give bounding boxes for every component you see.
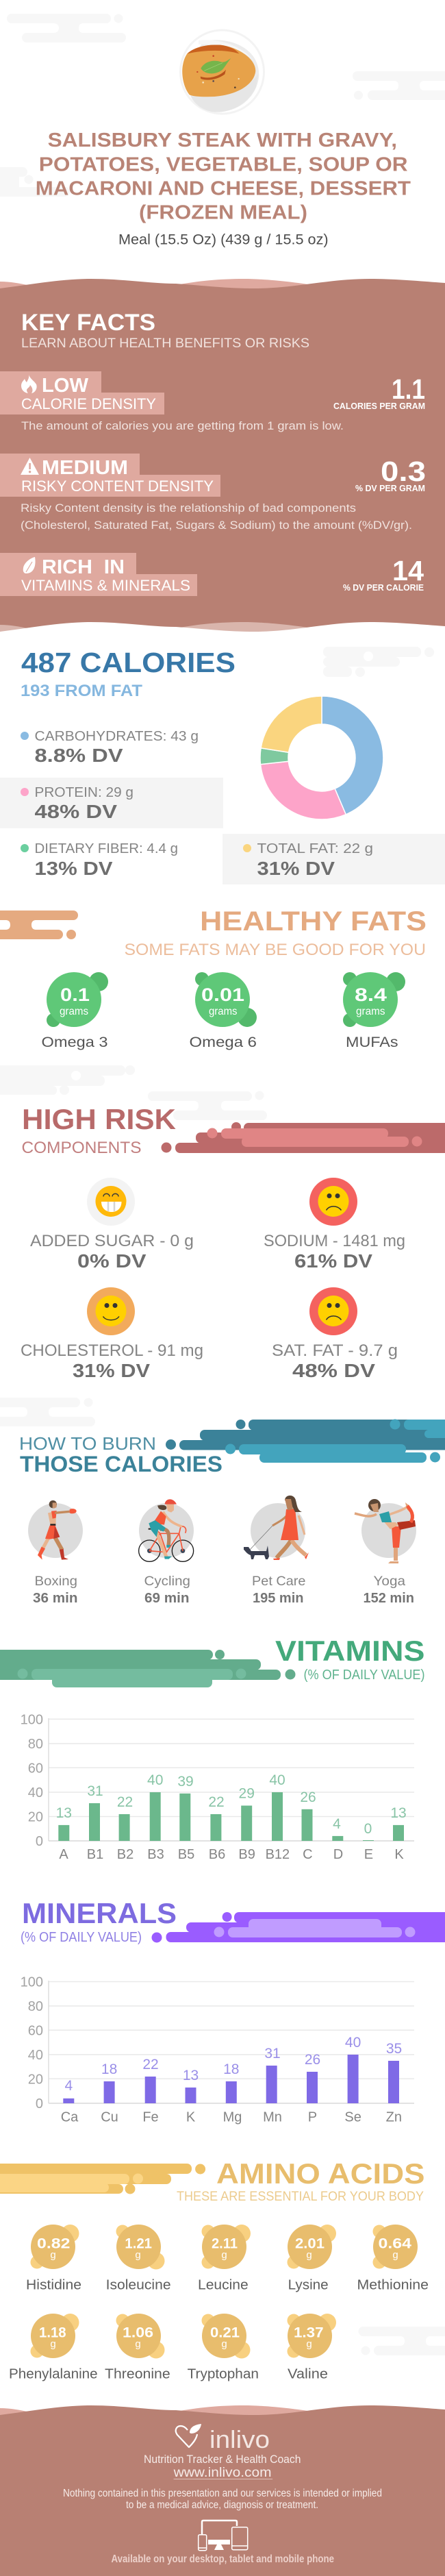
item: carbohydrates: CARBOHYDRATES: 43 g: [34, 729, 199, 744]
badge: omega 3: grams: [60, 1006, 88, 1017]
fact: vitamins and minerals: VITAMINS & MINERALS: [21, 577, 190, 594]
activity: yoga: [355, 1499, 416, 1563]
subheading: daily value: (% OF DAILY VALUE): [21, 1930, 142, 1945]
heading: high risk: HIGH RISK: [22, 1103, 176, 1135]
bar chart: vitamins: B2: [117, 1847, 134, 1862]
fact: vitamins and minerals: 14: [392, 555, 424, 586]
fact: risky content density: 0.3: [381, 456, 426, 487]
label: minutes: 195 min: [253, 1591, 304, 1606]
item: cholesterol: CHOLESTEROL - 91 mg: [21, 1341, 203, 1360]
panel: key facts: [0, 279, 445, 637]
subheading: amino acids: THESE ARE ESSENTIAL FOR YOUR BODY: [177, 2190, 424, 2204]
header: food image and title: [36, 30, 411, 248]
bar chart: minerals: 13: [183, 2068, 199, 2083]
bar chart: vitamins: B3: [147, 1847, 164, 1862]
bar chart: vitamins: B1: [87, 1847, 103, 1862]
bar chart: minerals: 22: [142, 2057, 159, 2072]
bar chart: minerals: Mg: [223, 2110, 242, 2125]
bar chart: vitamins: C: [303, 1847, 313, 1862]
bar chart: minerals: 0: [36, 2096, 43, 2111]
bubbles: decorative lobes: [30, 2225, 386, 2358]
fact: calorie density: [0, 371, 425, 432]
amino acid units: g: [221, 2249, 227, 2261]
amino acid names: [9, 2278, 429, 2382]
label: boxing: Yoga: [374, 1574, 405, 1589]
activity: pet care: [244, 1496, 309, 1560]
amino acid names: Isoleucine: [106, 2278, 171, 2293]
disclaimer: [63, 2488, 382, 2511]
label: minutes: 36 min: [33, 1591, 78, 1606]
label: minutes: [33, 1591, 414, 1606]
bar chart: vitamins: 13: [56, 1805, 72, 1821]
subheading: daily value: (% OF DAILY VALUE): [304, 1668, 424, 1683]
serving size: Meal (15.5 Oz) (439 g / 15.5 oz): [118, 232, 329, 248]
title: MACARONI AND CHEESE, DESSERT: [36, 178, 411, 200]
title: (FROZEN MEAL): [139, 201, 307, 223]
bar chart: vitamins: 80: [28, 1737, 43, 1752]
label: boxing: [34, 1574, 405, 1589]
item: total fat: 31% DV: [257, 858, 335, 879]
banner: orange bars: [0, 911, 78, 939]
amino acid units: g: [306, 2338, 312, 2350]
amino acid names: Valine: [288, 2367, 328, 2382]
icon: devices: [199, 2521, 248, 2551]
bar chart: minerals: 18: [101, 2061, 117, 2077]
bar chart: minerals: 31: [264, 2046, 281, 2061]
bar chart: vitamins: 40: [147, 1772, 163, 1788]
tagline: Nutrition Tracker & Health Coach: [144, 2453, 301, 2466]
disclaimer: to be a medical advice, diagnosis or treatment.: [126, 2499, 318, 2511]
bar chart: vitamins: D: [333, 1847, 343, 1862]
bar chart: vitamins: 0: [36, 1834, 43, 1849]
fact: calorie density: CALORIE DENSITY: [21, 395, 156, 412]
amino acid units: g: [50, 2338, 56, 2350]
amino acid units: g: [306, 2249, 312, 2261]
heading: those calories: THOSE CALORIES: [20, 1452, 222, 1476]
fact: risky content density: (Cholesterol, Saturated Fat, Sugars & Sodium) to the amount (%DV/gr).: [21, 519, 412, 532]
amino acid discs: [31, 2225, 418, 2358]
heading: key facts: KEY FACTS: [21, 310, 155, 336]
item: added sugar: [30, 1178, 194, 1272]
bar chart: minerals: Fe: [142, 2110, 159, 2125]
item: added sugar: ADDED SUGAR - 0 g: [30, 1232, 194, 1250]
icon: warning triangle: [21, 458, 39, 475]
bar chart: minerals: 60: [28, 2024, 43, 2039]
bar chart: vitamins: B5: [178, 1847, 194, 1862]
amino acid names: Tryptophan: [188, 2367, 259, 2382]
amino acid names: Lysine: [288, 2278, 329, 2293]
item: sodium: [264, 1178, 405, 1272]
bar chart: minerals: 35: [386, 2041, 402, 2057]
bar chart: minerals: 18: [223, 2061, 239, 2077]
bar chart: vitamins: 13: [390, 1805, 407, 1821]
amino acid values: 1.37: [294, 2325, 323, 2341]
item: dietary fiber: 13% DV: [34, 858, 113, 879]
heading: amino acids: AMINO ACIDS: [216, 2157, 424, 2190]
badge: omega 3: [41, 972, 108, 1050]
banner: green bars: [0, 1650, 296, 1687]
bar chart: minerals: 80: [28, 1999, 43, 2014]
bar chart: vitamins: 0: [364, 1821, 372, 1837]
bar chart: minerals: Cu: [101, 2110, 118, 2125]
fact: risky content density: % DV PER GRAM: [355, 483, 425, 493]
fact: risky content density: RISKY CONTENT DENSITY: [21, 478, 214, 495]
badge: mufas: grams: [356, 1006, 385, 1017]
item: saturated fat: 48% DV: [292, 1360, 375, 1381]
bar chart: minerals: 40: [28, 2048, 43, 2063]
bar chart: minerals: [21, 1974, 414, 2125]
banner: purple bars: [152, 1912, 445, 1943]
badge: omega 3: 0.1: [60, 984, 90, 1005]
panel: high risk components: [21, 1103, 445, 1381]
banner: teal bars: [166, 1420, 445, 1463]
fact: vitamins and minerals: % DV PER CALORIE: [343, 582, 424, 593]
bar chart: vitamins: B9: [238, 1847, 255, 1862]
item: protein: [21, 785, 134, 822]
bar chart: vitamins: B6: [209, 1847, 225, 1862]
fact: risky content density: Risky Content density is the relationship of bad components: [21, 502, 356, 515]
item: dietary fiber: DIETARY FIBER: 4.4 g: [34, 841, 178, 856]
bar chart: vitamins: 40: [28, 1785, 43, 1800]
panel: healthy fats: [0, 906, 427, 1050]
fact: calorie density: 1.1: [392, 373, 425, 405]
amino acid units: [50, 2249, 398, 2350]
badge: omega 6: 0.01: [201, 984, 244, 1005]
panel: vitamins: [0, 1635, 424, 1862]
label: boxing: Boxing: [34, 1574, 77, 1589]
item: total fat: [243, 841, 373, 879]
bar chart: minerals: Se: [344, 2110, 361, 2125]
item: total fat: TOTAL FAT: 22 g: [257, 841, 373, 856]
bar chart: vitamins: 100: [21, 1713, 43, 1728]
amino acid units: g: [221, 2338, 227, 2350]
bar chart: minerals: 100: [21, 1974, 43, 1990]
bar chart: vitamins: 26: [300, 1789, 316, 1805]
panel: minerals: [21, 1897, 445, 2125]
disclaimer: Nothing contained in this presentation and our services is intended or implied: [63, 2488, 382, 2499]
bar chart: vitamins: 4: [333, 1816, 341, 1832]
fact: vitamins and minerals: [0, 553, 424, 596]
website link: www.inlivo.com: [173, 2466, 272, 2480]
amino acid units: g: [50, 2249, 56, 2261]
amino acid names: Leucine: [198, 2278, 249, 2293]
title: POTATOES, VEGETABLE, SOUP OR: [39, 153, 408, 175]
amino acid values: 2.11: [212, 2236, 238, 2252]
fact: calorie density: The amount of calories you are getting from 1 gram is low.: [21, 420, 344, 432]
label: minutes: 69 min: [144, 1591, 189, 1606]
item: cholesterol: [21, 1287, 203, 1381]
bar chart: vitamins: 22: [208, 1794, 225, 1810]
bar chart: vitamins: E: [364, 1847, 373, 1862]
banner: red bars: [162, 1122, 445, 1153]
bar chart: minerals: Ca: [61, 2110, 79, 2125]
fact: risky content density: MEDIUM: [42, 457, 128, 479]
amino acid values: 1.21: [125, 2236, 152, 2252]
heading: how to burn: HOW TO BURN: [19, 1433, 156, 1454]
bar chart: vitamins: B12: [266, 1847, 290, 1862]
banner: yellow bars: [0, 2164, 205, 2194]
amino acid units: g: [135, 2249, 141, 2261]
amino acid values: 2.01: [295, 2236, 325, 2252]
badge: omega 6: grams: [209, 1006, 237, 1017]
amino acid values: 0.64: [378, 2236, 411, 2252]
title: SALISBURY STEAK WITH GRAVY,: [48, 129, 397, 151]
item: dietary fiber: [21, 841, 178, 879]
badge: omega 6: Omega 6: [189, 1035, 257, 1050]
bar chart: minerals: 26: [305, 2052, 320, 2068]
amino acid names: Histidine: [26, 2278, 81, 2293]
bar chart: minerals: K: [186, 2110, 196, 2125]
bar chart: minerals: Zn: [386, 2110, 402, 2125]
amino acid names: Threonine: [105, 2367, 170, 2382]
item: carbohydrates: [21, 729, 199, 766]
badge: mufas: [343, 972, 405, 1050]
bar chart: vitamins: 60: [28, 1761, 43, 1776]
amino acid values: [37, 2236, 411, 2341]
bar chart: vitamins: 29: [239, 1785, 255, 1802]
fact: vitamins and minerals: RICH IN: [42, 556, 125, 578]
badge: mufas: MUFAs: [346, 1035, 398, 1050]
fact: calorie density: CALORIES PER GRAM: [333, 401, 425, 411]
heading: minerals: MINERALS: [22, 1897, 177, 1929]
label: minutes: 152 min: [363, 1591, 414, 1606]
fact: risky content density: [0, 454, 426, 532]
heading: 487 calories: 487 CALORIES: [21, 647, 236, 678]
activity: cycling: [139, 1499, 194, 1561]
bar chart: vitamins: [21, 1713, 414, 1862]
panel: footer: [0, 2405, 445, 2576]
badge: omega 6: [189, 972, 257, 1050]
bar chart: vitamins: K: [394, 1847, 404, 1862]
item: carbohydrates: 8.8% DV: [34, 745, 123, 766]
item: protein: 48% DV: [34, 801, 117, 822]
amino acid units: g: [135, 2338, 141, 2350]
bar chart: vitamins: 20: [28, 1810, 43, 1825]
panel: how to burn calories: [19, 1420, 445, 1606]
availability note: Available on your desktop, tablet and mobile phone: [111, 2553, 334, 2565]
title: [36, 129, 411, 223]
subheading: key facts: LEARN ABOUT HEALTH BENEFITS OR RISKS: [21, 336, 309, 351]
panel: calories: [0, 647, 445, 884]
heading: healthy fats: HEALTHY FATS: [200, 906, 427, 937]
amino acid values: 1.18: [39, 2325, 66, 2341]
subheading: components: COMPONENTS: [22, 1139, 141, 1157]
amino acid values: 0.82: [37, 2236, 70, 2252]
item: added sugar: 0% DV: [77, 1250, 147, 1272]
bar chart: minerals: Mn: [263, 2110, 282, 2125]
fact: calorie density: LOW: [42, 375, 89, 397]
icon: flame: [21, 375, 37, 393]
bar chart: minerals: P: [308, 2110, 317, 2125]
heading: vitamins: VITAMINS: [275, 1635, 424, 1667]
bar chart: vitamins: 22: [117, 1794, 133, 1810]
item: cholesterol: 31% DV: [73, 1360, 150, 1381]
activity: boxing: [28, 1500, 83, 1560]
panel: amino acids: [0, 2157, 429, 2382]
item: sodium: SODIUM - 1481 mg: [264, 1232, 405, 1250]
bar chart: minerals: 40: [345, 2035, 361, 2051]
bar chart: vitamins: 39: [177, 1774, 194, 1789]
badge: mufas: 8.4: [355, 984, 387, 1005]
logo: wordmark: inlivo: [209, 2425, 270, 2453]
bar chart: minerals: 20: [28, 2072, 43, 2087]
bar chart: vitamins: 31: [87, 1783, 103, 1799]
item: protein: PROTEIN: 29 g: [34, 785, 134, 800]
bar chart: vitamins: 40: [269, 1772, 285, 1788]
icon: soup bowl: [181, 30, 264, 114]
amino acid values: 0.21: [210, 2325, 240, 2341]
label: boxing: Cycling: [144, 1574, 190, 1589]
amino acid names: Methionine: [357, 2278, 429, 2293]
item: saturated fat: [272, 1287, 398, 1381]
bar chart: vitamins: A: [59, 1847, 68, 1862]
badge: omega 3: Omega 3: [41, 1035, 108, 1050]
bar chart: minerals: 4: [64, 2078, 73, 2094]
donut chart: [260, 696, 383, 819]
amino acid values: 1.06: [123, 2325, 153, 2341]
item: sodium: 61% DV: [294, 1250, 372, 1272]
amino acid names: Phenylalanine: [9, 2367, 98, 2382]
icon: leaf: [23, 557, 36, 573]
subheading: from fat: 193 FROM FAT: [21, 682, 142, 700]
label: boxing: Pet Care: [252, 1574, 305, 1589]
subheading: healthy fats: SOME FATS MAY BE GOOD FOR YOU: [125, 941, 426, 959]
amino acid units: g: [392, 2249, 398, 2261]
item: saturated fat: SAT. FAT - 9.7 g: [272, 1341, 398, 1360]
logo: inlivo heart: [176, 2424, 201, 2447]
